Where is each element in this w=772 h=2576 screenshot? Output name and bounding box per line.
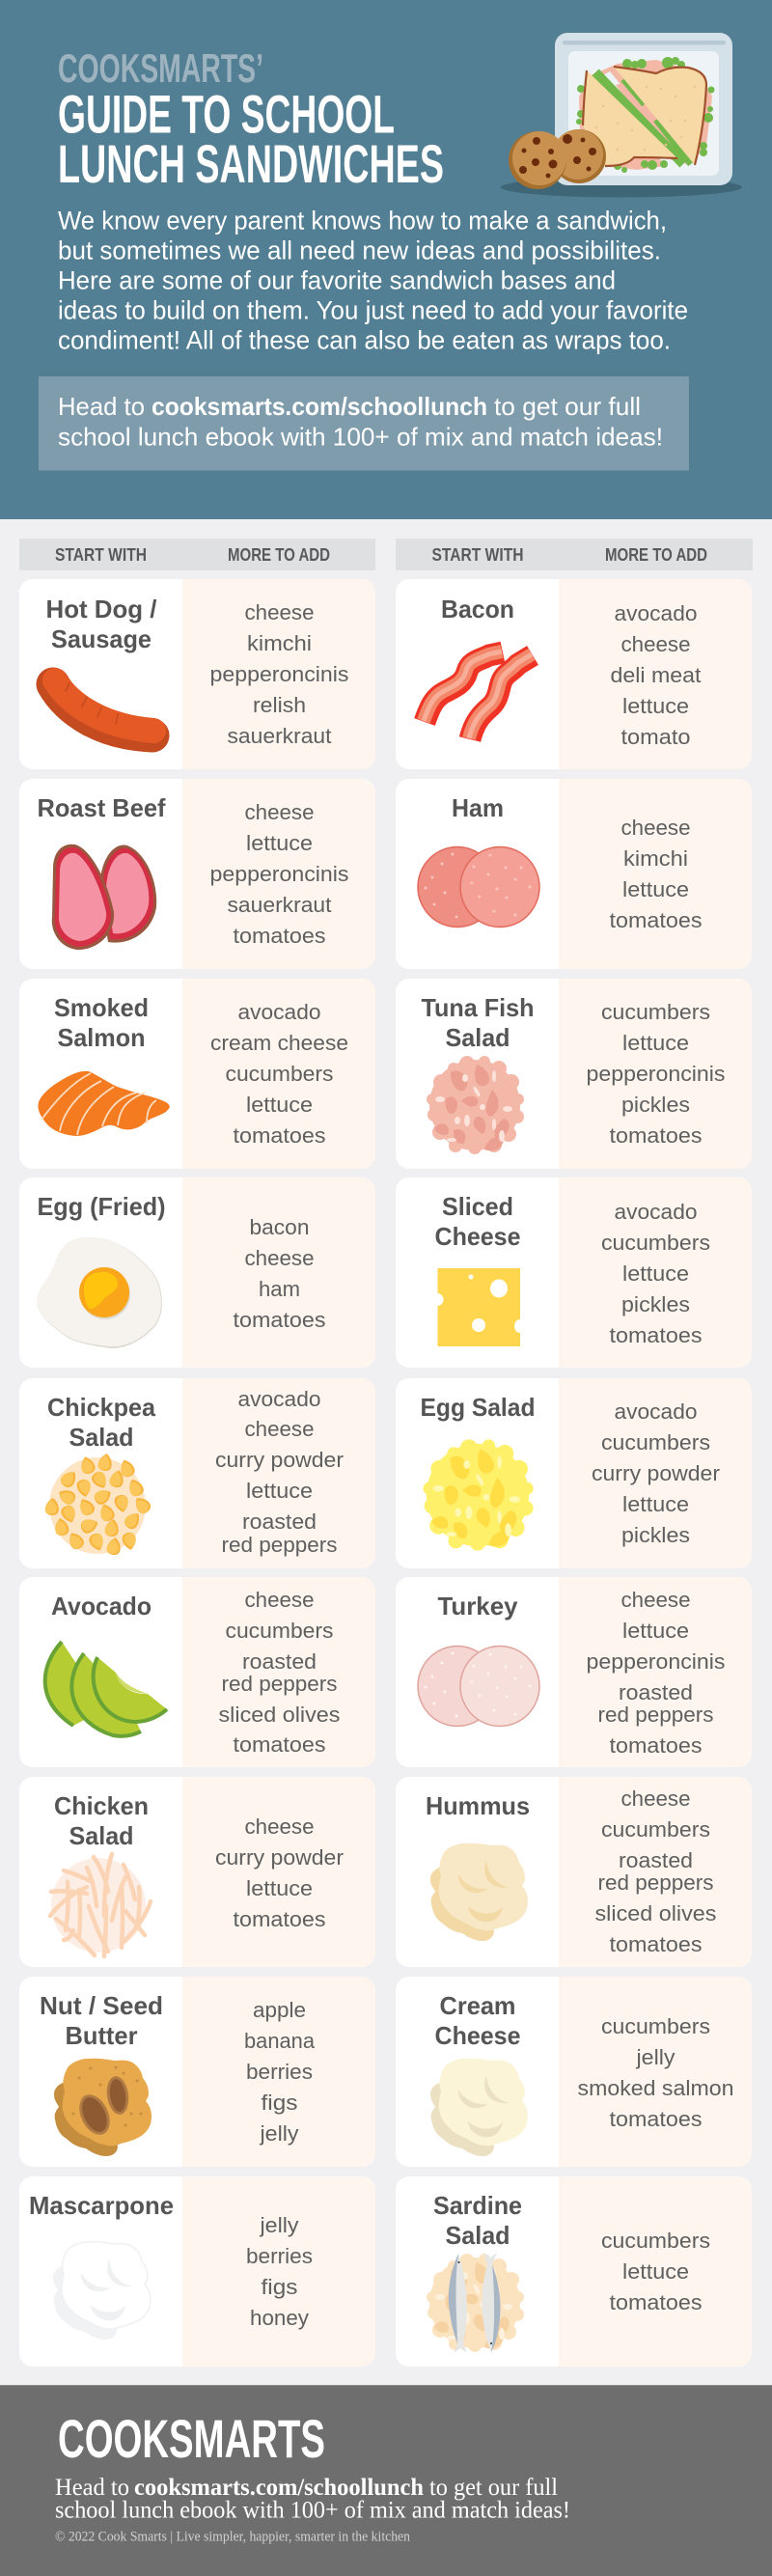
toppings: cheese [621, 1588, 691, 1612]
column headers: MORE TO ADD [228, 545, 330, 565]
toppings: relish [253, 693, 306, 717]
name [54, 993, 149, 1052]
toppings: curry powder [215, 1448, 344, 1472]
toppings: cheese [245, 800, 315, 824]
name: Butter [66, 2021, 137, 2050]
toppings [210, 600, 349, 748]
card: Turkey [396, 1577, 752, 1767]
card: Sliced Cheese [396, 1177, 752, 1368]
card: Tuna Fish Salad [396, 979, 752, 1169]
name: Smoked [54, 993, 149, 1022]
toppings: figs [261, 2275, 297, 2299]
card: Cream Cheese [396, 1977, 752, 2167]
copyright: © 2022 Cook Smarts | Live simpler, happier, smarter in the kitchen [55, 2529, 410, 2544]
callout: to get our full [494, 392, 641, 421]
toppings: tomatoes [234, 1732, 326, 1757]
toppings: ham [259, 1277, 300, 1301]
toppings: cucumbers [601, 1000, 710, 1024]
toppings: tomatoes [234, 924, 326, 948]
card: Egg Salad [396, 1378, 752, 1568]
toppings: tomatoes [610, 1123, 703, 1148]
card: Nut / Seed Butter [19, 1977, 375, 2167]
toppings: lettuce [622, 694, 689, 718]
toppings: tomatoes [610, 1932, 703, 1956]
brand wordmark: COOKSMARTS’ [58, 45, 263, 91]
card: Mascarpone [19, 2176, 375, 2367]
toppings: deli meat [610, 663, 701, 687]
name [433, 2191, 522, 2250]
toppings: jelly [259, 2213, 299, 2237]
card: Sardine Salad [396, 2176, 752, 2367]
toppings [610, 816, 703, 932]
icon: sausage [53, 680, 153, 735]
name: Tuna Fish [421, 993, 535, 1022]
icon: tuna salad [427, 1056, 524, 1154]
toppings: tomatoes [610, 1733, 703, 1758]
name: Salad [69, 1821, 133, 1850]
icon: avocado slices [45, 1642, 167, 1736]
name: Hot Dog / [46, 595, 156, 623]
toppings [210, 800, 349, 948]
intro text: ideas to build on them. You just need to add your favorite [58, 295, 688, 324]
toppings [587, 1000, 726, 1148]
toppings: banana [244, 2029, 316, 2053]
toppings: avocado [237, 1000, 320, 1024]
toppings: roasted [242, 1649, 317, 1674]
name [47, 1393, 156, 1452]
toppings: honey [250, 2306, 309, 2330]
icon: fried egg [37, 1237, 162, 1348]
toppings: pickles [621, 1292, 690, 1316]
toppings: bacon [249, 1215, 309, 1239]
toppings: avocado [237, 1387, 320, 1411]
footer call to action: Head to [55, 2475, 129, 2501]
card: Smoked Salmon [19, 979, 375, 1169]
toppings: curry powder [592, 1461, 720, 1485]
icon: hummus [430, 1843, 528, 1941]
toppings [577, 2014, 733, 2131]
toppings: sauerkraut [228, 893, 332, 917]
toppings: cheese [621, 816, 691, 840]
toppings: red peppers [222, 1533, 338, 1557]
name [40, 1991, 163, 2050]
toppings: jelly [259, 2121, 299, 2146]
icon: cheese slice [438, 1268, 520, 1346]
callout [39, 376, 689, 471]
name: Cream [440, 1991, 515, 2020]
toppings: avocado [614, 601, 697, 625]
toppings: cheese [621, 632, 691, 656]
icon: sandwich bag with cookies [501, 33, 742, 197]
name: Salmon [58, 1023, 145, 1052]
toppings [246, 2213, 313, 2330]
icon: cream cheese [430, 2059, 528, 2156]
toppings: lettuce [246, 831, 313, 855]
toppings: berries [246, 2244, 313, 2268]
toppings [601, 1200, 710, 1347]
name: Bacon [441, 595, 514, 623]
toppings: tomatoes [234, 1907, 326, 1931]
footer panel [0, 2385, 772, 2576]
toppings: cream cheese [210, 1031, 348, 1055]
toppings: smoked salmon [577, 2076, 733, 2100]
intro text: condiment! All of these can also be eaten as wraps too. [58, 326, 671, 355]
toppings: cheese [245, 1588, 315, 1612]
footer call to action: to get our full [429, 2475, 558, 2501]
name [421, 993, 535, 1052]
toppings: tomatoes [610, 2290, 703, 2314]
toppings: tomatoes [234, 1123, 326, 1148]
toppings: cucumbers [601, 1817, 710, 1842]
callout: Head to [58, 392, 145, 421]
card: Avocado [19, 1577, 375, 1767]
toppings: pickles [621, 1523, 690, 1547]
toppings: lettuce [622, 2259, 689, 2284]
name [54, 1791, 149, 1850]
toppings: lettuce [622, 1261, 689, 1286]
name: Chickpea [47, 1393, 156, 1422]
name: Roast Beef [37, 793, 166, 822]
toppings: avocado [614, 1200, 697, 1224]
name: Nut / Seed [40, 1991, 163, 2020]
icon: ham [418, 847, 539, 927]
toppings [244, 1998, 316, 2146]
toppings: sliced olives [218, 1703, 340, 1727]
name: Egg Salad [421, 1393, 535, 1422]
toppings [234, 1215, 326, 1332]
footer logo: COOKSMARTS [58, 2408, 325, 2469]
toppings: red peppers [598, 1703, 714, 1727]
column headers: MORE TO ADD [605, 545, 707, 565]
name [434, 1991, 521, 2050]
toppings [592, 1399, 720, 1547]
toppings: lettuce [246, 1093, 313, 1117]
toppings [601, 2229, 710, 2314]
name: Egg (Fried) [37, 1192, 166, 1221]
card: Egg (Fried) [19, 1177, 375, 1368]
toppings: sliced olives [594, 1901, 716, 1925]
name: Sausage [51, 624, 152, 653]
icon: turkey slices [418, 1647, 539, 1726]
toppings: jelly [635, 2045, 676, 2069]
name: Cheese [434, 2021, 521, 2050]
toppings: curry powder [215, 1845, 344, 1870]
icon: nut butter [54, 2059, 152, 2156]
name: Chicken [54, 1791, 149, 1820]
name: Salad [69, 1423, 133, 1452]
toppings [594, 1787, 716, 1956]
toppings [215, 1387, 344, 1557]
name [46, 595, 156, 653]
name: Turkey [438, 1592, 518, 1620]
intro text [58, 207, 688, 355]
toppings: lettuce [246, 1479, 313, 1503]
toppings: cucumbers [601, 2229, 710, 2253]
toppings: cheese [245, 1417, 315, 1441]
toppings: pepperoncinis [210, 862, 349, 886]
toppings: cucumbers [601, 1430, 710, 1454]
icon: roast beef [52, 845, 156, 950]
toppings: cheese [245, 1246, 315, 1270]
toppings: cheese [621, 1787, 691, 1811]
toppings: tomatoes [610, 2107, 703, 2131]
column headers: START WITH [55, 545, 147, 565]
intro text: Here are some of our favorite sandwich bases and [58, 266, 616, 295]
icon: shredded chicken [50, 1854, 151, 1956]
toppings: pickles [621, 1093, 690, 1117]
toppings: cucumbers [601, 1231, 710, 1255]
toppings: lettuce [622, 877, 689, 901]
toppings: avocado [614, 1399, 697, 1424]
title [58, 83, 444, 194]
title: LUNCH SANDWICHES [58, 133, 444, 194]
toppings [218, 1588, 340, 1757]
toppings: figs [261, 2091, 297, 2115]
intro text: but sometimes we all need new ideas and possibilites. [58, 235, 661, 264]
card: Chicken Salad [19, 1777, 375, 1967]
name: Salad [446, 1023, 510, 1052]
name: Mascarpone [29, 2191, 174, 2220]
toppings [587, 1588, 726, 1758]
name: Ham [452, 793, 504, 822]
toppings: cheese [245, 600, 315, 624]
title: GUIDE TO SCHOOL [58, 83, 395, 145]
card: Hot Dog / Sausage [19, 579, 375, 769]
toppings: tomatoes [610, 1323, 703, 1347]
name: Salad [446, 2221, 510, 2250]
toppings: cucumbers [226, 1619, 334, 1643]
icon: chickpeas [44, 1453, 153, 1556]
toppings [610, 601, 701, 749]
card: Bacon [396, 579, 752, 769]
toppings: roasted [619, 1680, 693, 1704]
column headers: START WITH [432, 545, 523, 565]
toppings: cucumbers [601, 2014, 710, 2038]
toppings: roasted [619, 1848, 693, 1872]
card: Chickpea Salad [19, 1378, 375, 1568]
toppings: lettuce [622, 1619, 689, 1643]
toppings: cheese [245, 1814, 315, 1839]
callout: school lunch ebook with 100+ of mix and match ideas! [58, 423, 663, 452]
toppings: cucumbers [226, 1062, 334, 1086]
icon: egg salad [423, 1439, 534, 1551]
name: Sliced [442, 1192, 513, 1221]
toppings: tomato [621, 725, 691, 749]
card: Hummus [396, 1777, 752, 1967]
name: Hummus [426, 1791, 530, 1820]
icon: salmon [38, 1071, 170, 1136]
callout: cooksmarts.com/schoollunch [152, 392, 487, 421]
icon: sardines [427, 2253, 524, 2353]
header panel [0, 0, 772, 519]
name: Sardine [433, 2191, 522, 2220]
card: Ham [396, 779, 752, 969]
card: Roast Beef [19, 779, 375, 969]
footer call to action: cooksmarts.com/schoollunch [134, 2475, 424, 2501]
toppings: lettuce [622, 1492, 689, 1516]
toppings: pepperoncinis [587, 1649, 726, 1674]
toppings: pepperoncinis [210, 662, 349, 686]
toppings: tomatoes [234, 1308, 326, 1332]
toppings [215, 1814, 344, 1931]
column headers [19, 539, 753, 570]
toppings [210, 1000, 348, 1148]
intro text: We know every parent knows how to make a sandwich, [58, 207, 667, 235]
icon: mascarpone [53, 2242, 151, 2340]
toppings: red peppers [222, 1672, 338, 1696]
toppings: berries [246, 2060, 313, 2084]
toppings: red peppers [598, 1870, 714, 1895]
toppings: kimchi [247, 631, 312, 655]
footer call to action: school lunch ebook with 100+ of mix and match ideas! [55, 2498, 570, 2523]
name [434, 1192, 521, 1251]
toppings: kimchi [623, 846, 688, 871]
footer call to action [55, 2475, 570, 2523]
name: Cheese [434, 1222, 521, 1251]
toppings: lettuce [246, 1876, 313, 1900]
toppings: pepperoncinis [587, 1062, 726, 1086]
name: Avocado [51, 1592, 152, 1620]
toppings: roasted [242, 1510, 317, 1534]
toppings: sauerkraut [228, 724, 332, 748]
toppings: tomatoes [610, 908, 703, 932]
toppings: lettuce [622, 1031, 689, 1055]
toppings: apple [253, 1998, 306, 2022]
icon: bacon [424, 651, 533, 739]
